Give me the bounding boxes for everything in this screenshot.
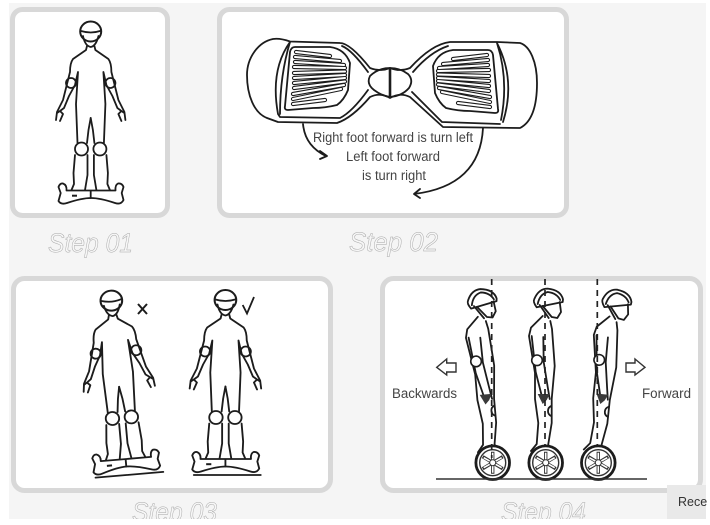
text: turning instructions bbox=[313, 130, 473, 183]
label: Forward: Forward bbox=[642, 386, 691, 401]
figure: correct stance on level board bbox=[190, 290, 261, 475]
text: turning instructions: is turn right bbox=[362, 168, 426, 183]
panel: step 02 bbox=[220, 10, 566, 216]
icon: cross mark bbox=[138, 304, 147, 314]
text: turning instructions: Left foot forward bbox=[346, 149, 440, 164]
bottom white mask bbox=[0, 519, 710, 525]
figure: leaning backwards bbox=[462, 279, 510, 480]
tab: Rece: Rece bbox=[678, 495, 707, 509]
panel: step 04 bbox=[382, 278, 700, 490]
icon: check mark bbox=[243, 297, 254, 314]
ground line bbox=[436, 478, 647, 480]
heading: Step 01: Step 01 bbox=[48, 228, 133, 258]
tab: Rece bbox=[667, 485, 707, 519]
figure: rider standing on board bbox=[56, 22, 125, 204]
arrow: turn left bbox=[303, 124, 327, 159]
label: Backwards: Backwards bbox=[392, 386, 457, 401]
arrow: turn right bbox=[414, 128, 483, 198]
panel: step 03 bbox=[14, 278, 330, 490]
arrow: backwards bbox=[437, 359, 456, 375]
arrow: forward bbox=[626, 359, 645, 375]
panel: step 01 bbox=[12, 10, 168, 216]
figure: upright bbox=[529, 279, 563, 480]
figure: leaning forward bbox=[582, 279, 633, 480]
text: turning instructions: Right foot forward is turn left bbox=[313, 130, 473, 145]
figure: incorrect stance on tilted board bbox=[75, 288, 163, 478]
heading: Step 02: Step 02 bbox=[349, 227, 438, 257]
illustration: hoverboard top view bbox=[247, 39, 537, 128]
